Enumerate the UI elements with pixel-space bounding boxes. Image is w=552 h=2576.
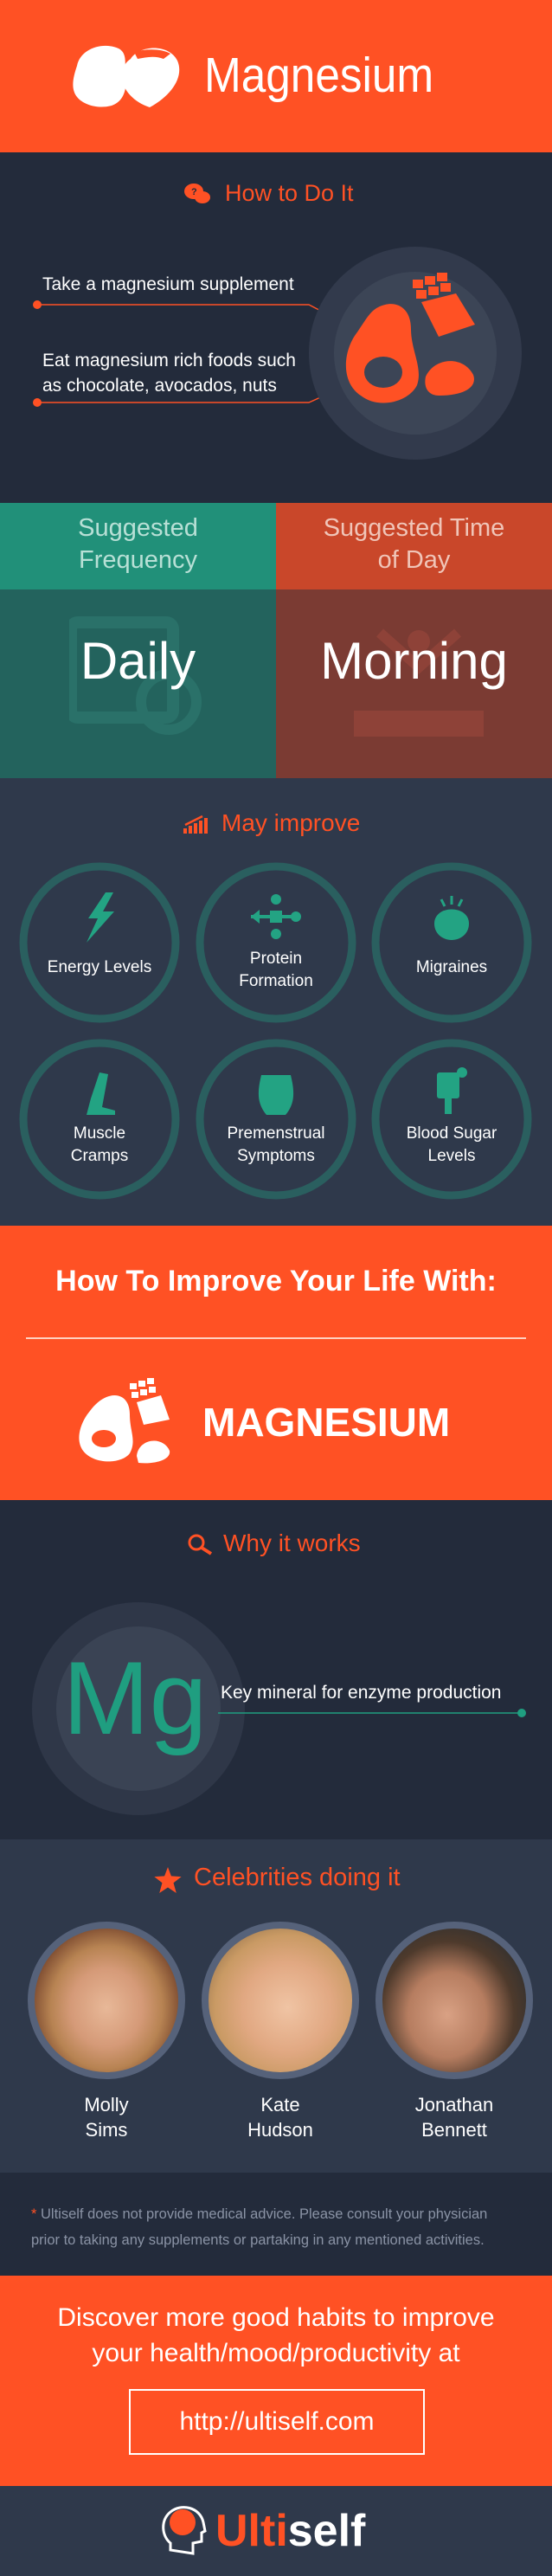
icon: waking person faint — [354, 628, 484, 737]
label: protein formation — [239, 950, 313, 990]
text: foods: Eat magnesium rich foods such — [42, 351, 296, 370]
label: migraines: Migraines — [416, 958, 487, 976]
icon: speech bubbles: ? — [191, 187, 197, 197]
label: muscle cramps — [71, 1124, 128, 1165]
button: url — [129, 2389, 425, 2455]
label: muscle cramps: Muscle — [74, 1124, 125, 1143]
name: kate hudson — [247, 2094, 313, 2141]
text: supplement: Take a magnesium supplement — [42, 274, 294, 294]
icon: leg cramp — [87, 1072, 115, 1115]
text: discover: Discover more good habits to improve — [57, 2303, 495, 2332]
icon: abdomen — [259, 1075, 293, 1115]
logo: ultiself: Ultiself — [215, 2506, 365, 2556]
icon: protein — [251, 894, 301, 939]
name: molly sims: Sims — [86, 2119, 127, 2141]
label: energy levels: Energy Levels — [48, 958, 151, 976]
photo: molly sims — [28, 1922, 185, 2079]
header band — [0, 0, 552, 152]
title: Magnesium — [204, 48, 433, 103]
disclaimer: * Ultiself does not provide medical advice. Please consult your physician — [31, 2206, 487, 2222]
panel: how to do it — [0, 152, 552, 503]
text: foods: as chocolate, avocados, nuts — [42, 376, 277, 396]
icon: star — [154, 1867, 182, 1893]
text: discover: your health/mood/productivity at — [92, 2339, 460, 2367]
label: muscle cramps: Cramps — [71, 1147, 128, 1165]
text: foods — [42, 351, 296, 396]
icon: Mg circle — [32, 1602, 245, 1815]
icon: speech bubbles — [184, 184, 210, 203]
label: premenstrual symptoms: Premenstrual — [227, 1124, 325, 1143]
name: kate hudson: Hudson — [247, 2119, 313, 2141]
label: premenstrual symptoms — [227, 1124, 325, 1165]
label: blood sugar levels — [407, 1124, 497, 1165]
name: jonathan bennett: Bennett — [421, 2119, 487, 2141]
label: suggested time: of Day — [378, 546, 450, 574]
label: suggested frequency: Frequency — [79, 546, 197, 574]
icon: migraine brain — [434, 896, 469, 940]
text: magnesium: MAGNESIUM — [202, 1400, 450, 1445]
heading: how to improve: How To Improve Your Life With: — [55, 1265, 497, 1298]
icon: Mg circle: Mg — [63, 1640, 207, 1756]
label: blood sugar levels: Blood Sugar — [407, 1124, 497, 1143]
value: daily: Daily — [80, 632, 196, 690]
label: protein formation: Formation — [239, 972, 313, 990]
heading: celebrities: Celebrities doing it — [194, 1864, 401, 1891]
icon: plate with avocado chocolate nut — [309, 247, 522, 460]
panel: call to action — [0, 2276, 552, 2486]
text: discover — [57, 2303, 495, 2367]
heading: why it works: Why it works — [223, 1530, 361, 1556]
label: premenstrual symptoms: Symptoms — [237, 1147, 315, 1165]
name: molly sims: Molly — [84, 2094, 129, 2116]
panel: celebrities — [0, 1839, 552, 2173]
text: enzyme: Key mineral for enzyme production — [221, 1683, 502, 1703]
icon: glucose meter — [437, 1067, 467, 1114]
label: suggested frequency: Suggested — [78, 514, 198, 542]
icon: bar chart — [183, 815, 208, 834]
label: suggested time: Suggested Time — [324, 514, 504, 542]
icon: magnesium foods — [79, 1378, 170, 1463]
icon: magnifier — [189, 1534, 212, 1555]
name: molly sims — [84, 2094, 129, 2141]
icon: calendar faint — [69, 616, 202, 735]
disclaimer — [0, 2173, 552, 2276]
value: morning: Morning — [320, 632, 508, 690]
heading: may improve: May improve — [221, 809, 360, 836]
label: suggested frequency — [0, 503, 276, 589]
panel: may improve — [0, 778, 552, 1226]
panel: suggested frequency — [0, 503, 276, 778]
name: kate hudson: Kate — [260, 2094, 300, 2116]
icon: hazelnuts — [73, 45, 180, 107]
photo: kate hudson — [202, 1922, 359, 2079]
icon: brain head — [162, 2506, 207, 2555]
label: suggested time — [276, 503, 552, 589]
disclaimer: prior to taking any supplements or partaking in any mentioned activities. — [31, 2232, 485, 2248]
panel: suggested time of day — [276, 503, 552, 778]
photo: jonathan bennett — [375, 1922, 533, 2079]
panel: how to improve banner — [0, 1226, 552, 1500]
panel: why it works — [0, 1500, 552, 1839]
name: jonathan bennett — [415, 2094, 493, 2141]
label: protein formation: Protein — [250, 950, 302, 968]
label: blood sugar levels: Levels — [428, 1147, 475, 1165]
footer — [0, 2486, 552, 2576]
icon: lightning — [87, 892, 114, 943]
button: url: http://ultiself.com — [179, 2407, 375, 2436]
name: jonathan bennett: Jonathan — [415, 2094, 493, 2116]
heading: how to do it: How to Do It — [225, 180, 354, 206]
